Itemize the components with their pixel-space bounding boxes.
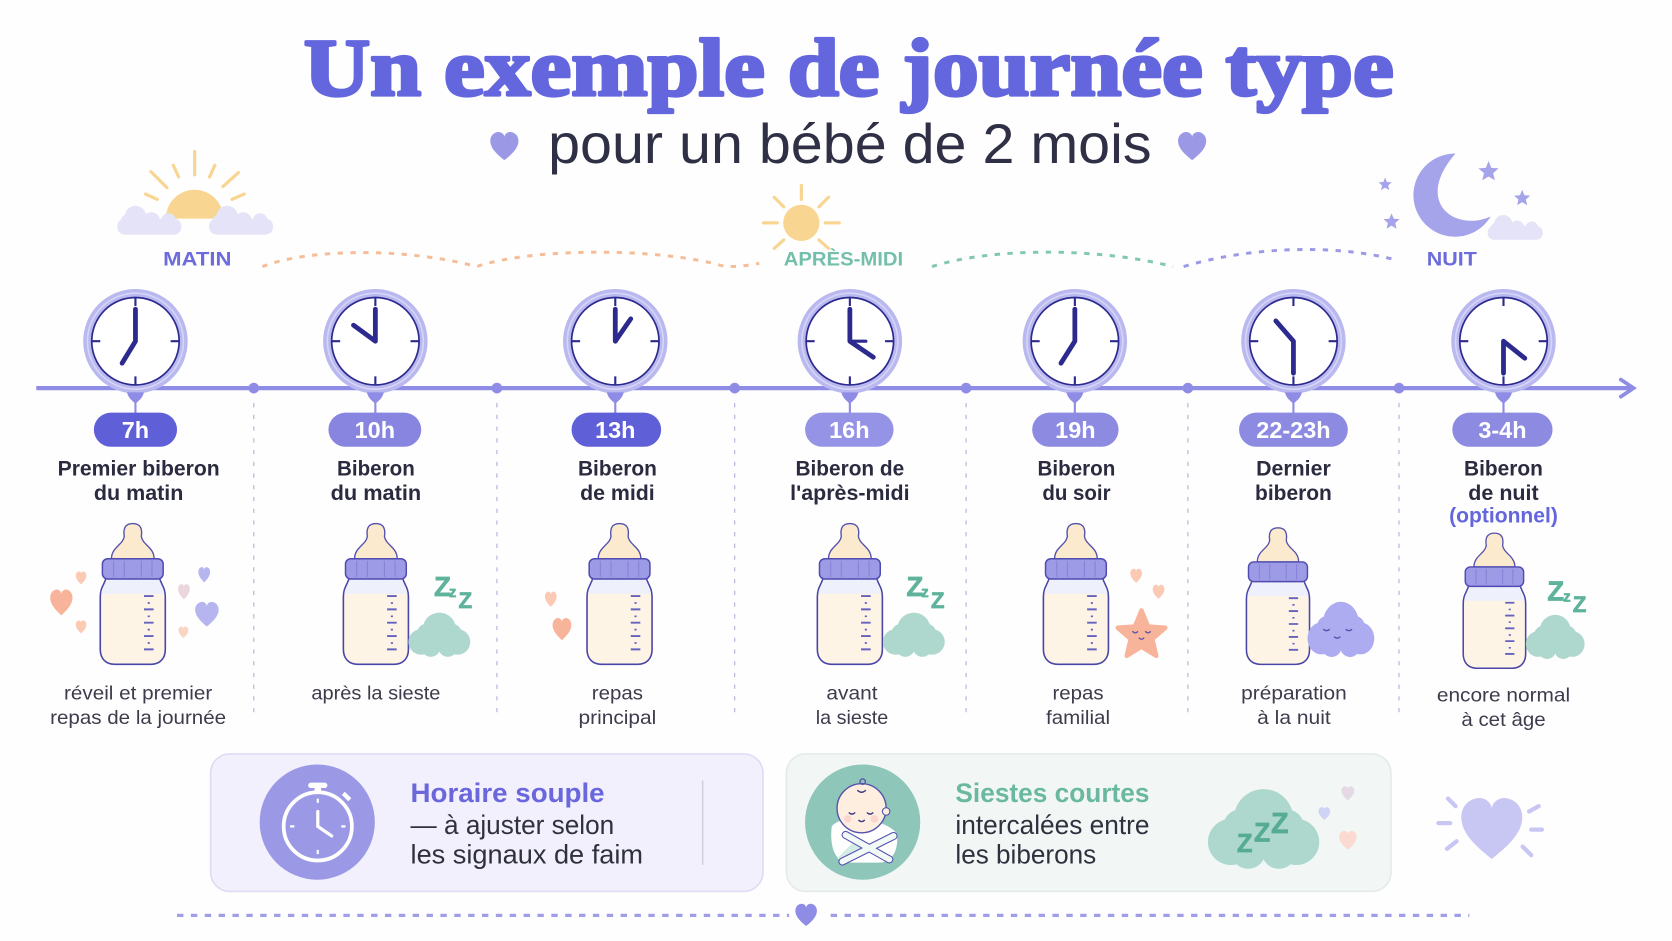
time pill 13h [572, 413, 661, 447]
label: après-midi: APRÈS-MIDI [784, 249, 903, 271]
icon: bottle [817, 524, 882, 664]
heading: Biberon de [795, 457, 904, 481]
dotted wave: orange [262, 252, 759, 267]
time pill 10h: 10h [355, 417, 395, 443]
icon: bottle [587, 524, 652, 664]
time pill 3-4h: 3-4h [1478, 417, 1527, 443]
clock 10h [323, 289, 428, 393]
heading: Biberon [337, 457, 415, 481]
icon: zzz cloud [1208, 786, 1357, 869]
icon: sleep cloud: z [1563, 588, 1571, 605]
time pill 16h: 16h [829, 417, 870, 443]
icon: sleep cloud: Z [931, 588, 945, 613]
icon: zzz cloud: Z [1254, 817, 1270, 847]
icon: bottle [1463, 533, 1526, 668]
panel: horaire souple: les signaux de faim [411, 840, 643, 870]
caption: réveil et premier [64, 682, 213, 704]
panel: step 10h [311, 289, 473, 704]
time pill 10h [328, 413, 421, 447]
panel: siestes courtes [786, 754, 1391, 891]
panel: step 22-23h [1239, 289, 1374, 729]
icon: sleep cloud [408, 571, 473, 657]
heading: Premier biberon [58, 457, 220, 481]
timeline arrow [36, 380, 1634, 397]
panel: step 16h: l'après-midi [790, 481, 910, 505]
time pill 19h [1032, 413, 1119, 447]
icon: sleep cloud: Z [459, 588, 473, 613]
panel: horaire souple [211, 754, 763, 891]
icon: hearts [50, 567, 219, 638]
panel: step 19h: du soir [1042, 481, 1111, 505]
panel: step 13h [545, 289, 668, 729]
panel: step 10h: du matin [331, 481, 421, 505]
panel: step 19h [1023, 289, 1165, 729]
icon: glowing heart [1438, 798, 1542, 859]
time pill 22-23h: 22-23h [1256, 417, 1331, 443]
icon: sleep cloud: z [449, 584, 456, 601]
panel: step 3-4h: à cet âge [1461, 709, 1546, 731]
icon: bottle [100, 524, 165, 664]
panel: step 16h [790, 289, 945, 729]
clock 16h [798, 289, 902, 393]
time pill 19h: 19h [1055, 417, 1096, 443]
clock 3-4h [1451, 289, 1556, 393]
icon: heart right [1178, 132, 1206, 160]
panel: step 7h: repas de la journée [50, 707, 226, 729]
clock 22-23h [1241, 289, 1346, 393]
panel: step 13h: principal [578, 707, 656, 729]
icon: afternoon sun [763, 186, 839, 248]
icon: sleep cloud: Z [434, 571, 451, 602]
icon: bottle [343, 524, 408, 664]
icon: hearts [545, 592, 571, 640]
caption: préparation [1241, 682, 1347, 704]
label: nuit: NUIT [1427, 250, 1477, 271]
panel: siestes courtes: intercalées entre [955, 810, 1149, 840]
panel: step 22-23h: à la nuit [1257, 707, 1331, 729]
heading: Biberon [578, 457, 657, 481]
caption: après la sieste [311, 682, 440, 704]
panel: horaire souple: — à ajuster selon [411, 810, 614, 840]
text: Horaire souple [411, 778, 605, 808]
panel: step 22-23h: biberon [1255, 481, 1332, 505]
icon: smiling star [1118, 569, 1165, 656]
icon: sleep cloud: z [921, 584, 929, 601]
icon: bottle [1246, 528, 1310, 664]
icon: sleeping baby [805, 765, 920, 880]
time pill 3-4h [1452, 413, 1553, 447]
icon: zzz cloud: Z [1237, 830, 1253, 858]
time pill 7h: 7h [122, 417, 149, 443]
time pill 22-23h [1239, 413, 1348, 447]
dotted wave: green [932, 252, 1173, 267]
heading: Biberon [1464, 457, 1543, 481]
label: matin: MATIN [163, 250, 231, 271]
clock 19h [1023, 289, 1127, 393]
panel: step 7h: du matin [94, 481, 183, 505]
dotted wave: purple [1184, 249, 1397, 267]
icon: sleep cloud: Z [1573, 592, 1587, 617]
optional tag: (optionnel) [1449, 503, 1558, 527]
panel: step 3-4h: de nuit [1468, 481, 1539, 505]
icon: heart left [490, 132, 518, 160]
icon: sleep cloud: Z [1547, 575, 1564, 606]
panel: step 16h: la sieste [816, 707, 888, 729]
time pill 7h [94, 413, 177, 447]
title: Un exemple de journée type [304, 22, 1394, 113]
clock 7h [83, 289, 188, 393]
icon: stopwatch [260, 765, 375, 880]
panel: step 7h [50, 289, 226, 729]
caption: encore normal [1437, 685, 1570, 707]
time pill 13h: 13h [595, 417, 635, 443]
icon: bottle [1043, 524, 1108, 664]
subtitle: pour un bébé de 2 mois [548, 113, 1152, 175]
clock 13h [563, 289, 668, 393]
caption: avant [826, 682, 878, 704]
icon: sleep cloud: Z [906, 571, 923, 602]
panel: step 19h: familial [1046, 707, 1110, 729]
icon: sleep cloud [883, 571, 945, 657]
time pill 16h [805, 413, 894, 447]
icon: moon and stars [1379, 154, 1543, 240]
icon: sleep cloud [1526, 575, 1587, 659]
heading: Dernier [1256, 457, 1331, 481]
text: Siestes courtes [955, 778, 1149, 808]
icon: morning sun with clouds [117, 151, 273, 235]
heading: Biberon [1038, 457, 1115, 481]
panel: siestes courtes: les biberons [955, 840, 1096, 870]
caption: repas [1052, 682, 1104, 704]
panel: step 13h: de midi [580, 481, 655, 505]
panel: step 3-4h [1437, 289, 1587, 731]
icon: sleeping cloud [1307, 602, 1374, 657]
icon: zzz cloud: Z [1271, 808, 1289, 840]
caption: repas [592, 682, 643, 704]
footer dashed line with heart [177, 904, 1469, 926]
